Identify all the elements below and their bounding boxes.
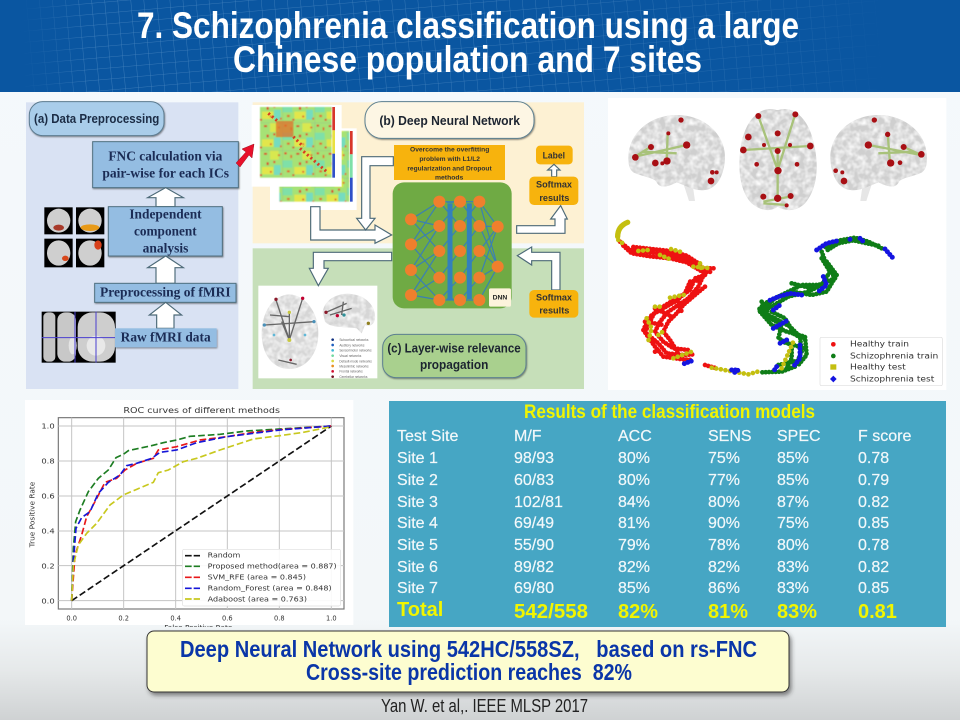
row: site 2: 85%: [777, 472, 809, 489]
row: site 5: 79%: [618, 537, 650, 554]
row: site 2: 0.79: [858, 472, 889, 489]
heading: layer-wise relevance propagation: propagation: [420, 358, 488, 372]
legend: scatter classes: Schizophrenia train: [850, 351, 938, 360]
row: site 2: Site 2: [397, 472, 438, 489]
step: raw fMRI data: [115, 328, 217, 347]
x axis labels: [66, 615, 337, 623]
row: site 6: 0.82: [858, 559, 889, 576]
row: total: 83%: [777, 601, 817, 623]
legend: ROC methods: Proposed method(area = 0.887): [208, 563, 337, 571]
row: site 6: 82%: [708, 559, 740, 576]
callout: key finding: Cross-site prediction reaches 82%: [306, 659, 632, 685]
arrow: ICA to FNC: [148, 188, 183, 207]
legend: scatter classes: Healthy test: [850, 363, 906, 372]
row: site 3: 87%: [777, 494, 809, 511]
row: site 2: 77%: [708, 472, 740, 489]
title: [137, 5, 799, 80]
icon: brain top view: [739, 109, 817, 210]
row: site 3: Site 3: [397, 494, 438, 511]
row: total: 81%: [708, 601, 748, 623]
row: site 4: 75%: [777, 515, 809, 532]
step: FNC calculation: FNC calculation via: [108, 150, 222, 165]
heatmap: first FNC matrix: [252, 105, 342, 187]
series: schizophrenia train: [758, 238, 882, 372]
row: site 1: [397, 450, 889, 467]
chart: embedding scatter: [618, 222, 892, 375]
row: site 1: 85%: [777, 450, 809, 467]
row: site 7: Site 7: [397, 580, 438, 597]
title: Chinese population and 7 sites: [233, 39, 702, 80]
y axis labels: 0.4: [41, 528, 55, 536]
series: schizophrenia test: [651, 238, 892, 375]
header banner: [0, 0, 960, 92]
row: site 6: [397, 559, 889, 576]
row: site 6: 89/82: [514, 559, 554, 576]
image: raw fMRI slices: [42, 312, 116, 363]
row: site 4: [397, 515, 889, 532]
image: relevance brain maps: Auditory networks: [339, 343, 365, 347]
step: independent component analysis: component: [134, 224, 197, 239]
arrow: DNN to softmax: [517, 206, 567, 233]
callout: overfitting note: [394, 145, 505, 182]
image: relevance brain maps: Subcortical networks: [339, 338, 369, 342]
row: site 4: 0.85: [858, 515, 889, 532]
row: site 2: 60/83: [514, 472, 554, 489]
box: softmax results top: results: [539, 193, 569, 203]
row: site 7: 86%: [708, 580, 740, 597]
row: site 5: 0.78: [858, 537, 889, 554]
x axis labels: 0.8: [274, 615, 285, 623]
x axis labels: 0.6: [222, 615, 233, 623]
image: relevance brain maps: Sensorimotor networks: [339, 349, 372, 353]
image: relevance brain maps: Visual networks: [339, 354, 362, 358]
citation: Yan W. et al,. IEEE MLSP 2017: [381, 696, 588, 716]
row: site 7: [397, 580, 889, 597]
y axis labels: True Positive Rate: [29, 482, 37, 548]
step: raw fMRI data: Raw fMRI data: [121, 330, 211, 345]
row: site 3: 0.82: [858, 494, 889, 511]
legend: scatter classes: Schizophrenia test: [850, 374, 934, 383]
box: softmax results bottom: results: [539, 306, 569, 316]
chart: ROC plot area: [58, 418, 344, 609]
row: total: [397, 599, 897, 623]
arrow: regularization to DNN: [357, 157, 393, 230]
legend: scatter classes: Healthy train: [850, 340, 909, 349]
step: preprocessing of fMRI: Preprocessing of fMRI: [100, 285, 231, 300]
arrow: preprocessing to ICA: [148, 256, 183, 283]
row: site 2: 80%: [618, 472, 650, 489]
image: relevance brain maps: Frontal networks: [339, 370, 363, 374]
x axis labels: 1.0: [326, 615, 337, 623]
box: softmax results top: Softmax: [536, 180, 573, 190]
y axis labels: 0.8: [41, 458, 55, 466]
icon: brain left view: [628, 115, 725, 201]
row: site 1: 80%: [618, 450, 650, 467]
table header row: F score: [858, 428, 911, 445]
table header row: Test Site: [397, 428, 458, 445]
row: site 7: 83%: [777, 580, 809, 597]
y axis labels: [29, 423, 55, 605]
title: 7. Schizophrenia classification using a large: [137, 5, 799, 46]
y axis labels: 0.2: [41, 562, 55, 570]
icon: brain right view: [830, 115, 927, 201]
x axis labels: 0.4: [170, 615, 181, 623]
heatmap: second FNC matrix: [270, 128, 357, 210]
row: site 5: Site 5: [397, 537, 438, 554]
box: label: Label: [543, 150, 565, 160]
heading: layer-wise relevance propagation: (c) Layer-wise relevance: [387, 341, 521, 355]
row: total: 82%: [618, 601, 658, 623]
row: site 2: [397, 472, 889, 489]
heading: data preprocessing: [29, 102, 164, 136]
row: site 6: 82%: [618, 559, 650, 576]
table header row: [397, 428, 911, 445]
row: site 1: Site 1: [397, 450, 438, 467]
row: site 5: 80%: [777, 537, 809, 554]
heading: layer-wise relevance propagation: [383, 334, 526, 378]
step: independent component analysis: analysis: [143, 241, 189, 256]
table header row: SPEC: [777, 428, 821, 445]
legend: ROC methods: Random_Forest (area = 0.848): [208, 585, 332, 593]
table header row: ACC: [618, 428, 652, 445]
box: label: [536, 146, 573, 164]
heading: deep neural network: (b) Deep Neural Network: [379, 114, 521, 128]
legend: ROC methods: Random: [208, 552, 240, 560]
series: healthy train: [620, 242, 796, 368]
arrow: softmax back to DNN: [517, 247, 560, 290]
callout: key finding: [147, 631, 789, 692]
row: site 4: 81%: [618, 515, 650, 532]
y axis labels: 0.0: [41, 597, 55, 605]
panel: ROC chart: [25, 400, 353, 632]
row: total: 542/558: [514, 601, 588, 623]
legend: ROC methods: SVM_RFE (area = 0.845): [208, 573, 306, 581]
callout: overfitting note: Overcome the overfitting: [410, 147, 489, 154]
box: softmax results bottom: Softmax: [536, 292, 573, 302]
legend: ROC methods: [182, 549, 341, 606]
x axis labels: 0.0: [66, 615, 77, 623]
callout: key finding: Deep Neural Network using 542HC/558SZ, based on rs-FNC: [180, 636, 757, 662]
panel: results table: [389, 401, 946, 627]
heading: data preprocessing: (a) Data Preprocessing: [34, 111, 159, 126]
row: site 5: [397, 537, 889, 554]
row: total: 0.81: [858, 601, 897, 623]
diagram: DNN network: DNN: [493, 294, 508, 301]
panel: data preprocessing: [26, 102, 238, 389]
arrow: raw data to preprocessing: [149, 302, 182, 328]
callout: overfitting note: problem with L1/L2: [419, 156, 480, 163]
table header row: SENS: [708, 428, 752, 445]
table header row: M/F: [514, 428, 542, 445]
row: site 1: 75%: [708, 450, 740, 467]
row: site 7: 69/80: [514, 580, 554, 597]
callout: overfitting note: methods: [435, 175, 464, 182]
callout: overfitting note: regularization and Dropout: [407, 165, 492, 172]
row: site 3: [397, 494, 889, 511]
panel: brain connectivity and embedding: [608, 98, 946, 390]
image: relevance brain maps: [258, 286, 377, 379]
row: site 6: Site 6: [397, 559, 438, 576]
row: site 5: 78%: [708, 537, 740, 554]
table title: Results of the classification models: [524, 402, 815, 423]
image: relevance brain maps: Mesolimbic networks: [339, 364, 369, 368]
row: site 4: 90%: [708, 515, 740, 532]
row: site 6: 83%: [777, 559, 809, 576]
row: site 7: 0.85: [858, 580, 889, 597]
y axis labels: 0.6: [41, 493, 55, 501]
row: total: Total: [397, 599, 443, 621]
row: site 3: 102/81: [514, 494, 563, 511]
legend: ROC methods: Adaboost (area = 0.763): [208, 595, 307, 603]
panel: deep neural network and relevance propagation: [252, 102, 584, 389]
box: softmax results top: [529, 177, 578, 205]
diagram: DNN network: [393, 182, 512, 308]
series: healthy test: [618, 222, 793, 374]
step: FNC calculation: [93, 142, 238, 188]
arrow: softmax to label: [548, 164, 560, 177]
icon: independent component brain maps: [44, 207, 104, 267]
arrow: matrix to DNN: [311, 207, 392, 243]
row: site 5: 55/90: [514, 537, 554, 554]
box: softmax results bottom: [529, 290, 578, 318]
x axis labels: 0.2: [118, 615, 129, 623]
row: site 4: Site 4: [397, 515, 438, 532]
row: site 1: 98/93: [514, 450, 554, 467]
image: relevance brain maps: Cerebellar networks: [339, 375, 368, 379]
step: independent component analysis: [108, 207, 222, 256]
arrow: DNN to relevance brains: [309, 252, 392, 286]
row: site 3: 80%: [708, 494, 740, 511]
step: independent component analysis: Independent: [129, 207, 202, 222]
y axis labels: 1.0: [41, 423, 55, 431]
chart title: ROC curves of different methods: [123, 405, 280, 415]
x axis title clipped: False Positive Rate: [164, 623, 233, 632]
row: site 3: 84%: [618, 494, 650, 511]
row: site 7: 85%: [618, 580, 650, 597]
image: relevance brain maps: Default-mode networks: [339, 359, 372, 363]
icon: red arrow from FNC to matrix: [236, 144, 254, 167]
legend: scatter classes: [820, 337, 942, 386]
step: FNC calculation: pair-wise for each ICs: [102, 166, 230, 181]
heading: deep neural network: [365, 102, 534, 138]
row: site 1: 0.78: [858, 450, 889, 467]
row: site 4: 69/49: [514, 515, 554, 532]
